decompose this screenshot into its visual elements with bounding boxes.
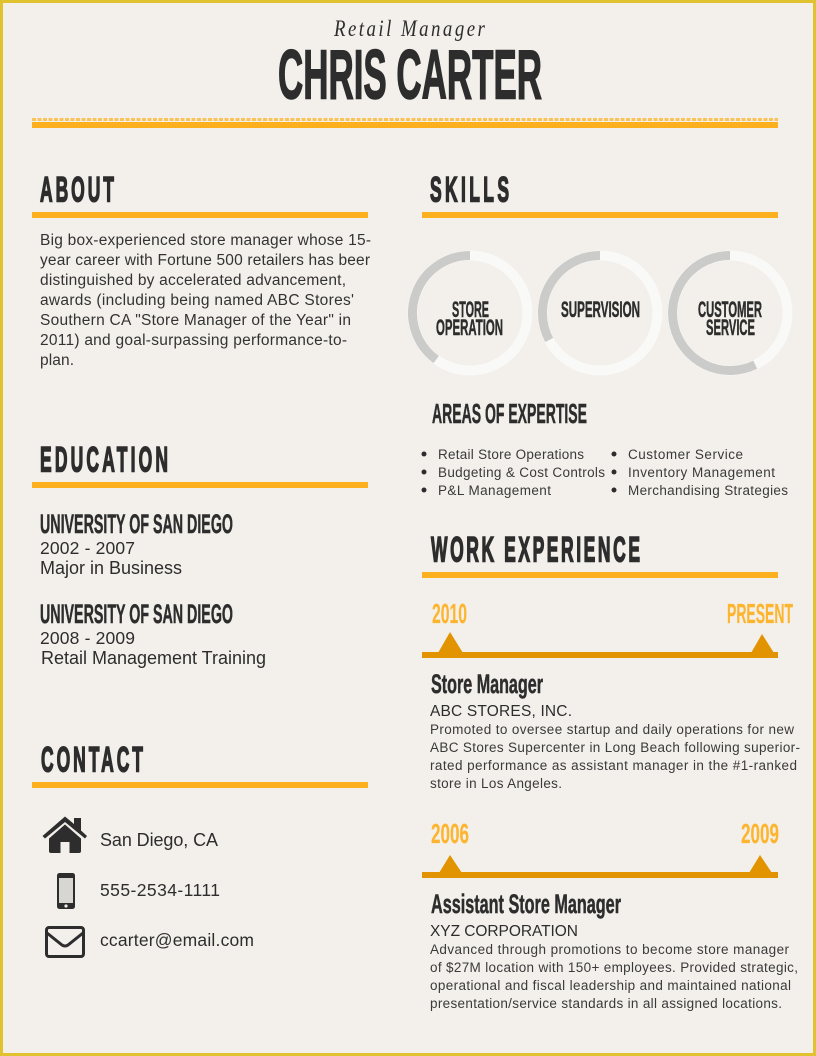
- about text: 2011) and goal-surpassing performance-to-: [40, 332, 347, 349]
- expertise list: Retail Store Operations: [438, 447, 584, 462]
- about text: Southern CA "Store Manager of the Year" in: [40, 312, 351, 329]
- job: store manager: Store Manager: [431, 669, 543, 699]
- education entry 2: Retail Management Training: [41, 648, 266, 668]
- job: assistant store manager: operational and fiscal leadership and maintained national: [430, 978, 791, 993]
- icon: phone: [57, 873, 75, 909]
- job: assistant store manager: presentation/service standards in all assigned locations.: [430, 996, 782, 1011]
- skill ring: supervision: [542, 255, 658, 370]
- icon: envelope: [46, 928, 84, 956]
- education entry 2: [40, 599, 266, 668]
- timeline: 2010 to present: [422, 598, 793, 658]
- expertise list: [422, 447, 788, 498]
- panel: education: [32, 440, 368, 668]
- education entry 1: 2002 - 2007: [40, 538, 135, 558]
- education entry 2: UNIVERSITY OF SAN DIEGO: [40, 599, 233, 629]
- job: store manager: ABC STORES, INC.: [430, 703, 572, 720]
- header: [32, 15, 778, 128]
- heading: about: ABOUT: [40, 170, 114, 209]
- education entry 1: UNIVERSITY OF SAN DIEGO: [40, 509, 233, 539]
- panel: contact: [32, 740, 368, 956]
- panel: about: [32, 170, 371, 369]
- education entry 1: Major in Business: [40, 558, 182, 578]
- heading: skills: SKILLS: [430, 170, 509, 209]
- header rule: [32, 120, 778, 128]
- about text: year career with Fortune 500 retailers has beer: [40, 252, 370, 269]
- job: store manager: ABC Stores Supercenter in Long Beach following superior-: [430, 740, 800, 755]
- job: store manager: store in Los Angeles.: [430, 776, 562, 791]
- about text: awards (including being named ABC Stores': [40, 292, 354, 309]
- header: CHRIS CARTER: [278, 36, 542, 114]
- panel: work experience: [422, 530, 800, 1011]
- skill ring: store operation: OPERATION: [436, 315, 503, 340]
- expertise list: Budgeting & Cost Controls: [438, 465, 605, 480]
- expertise list: Customer Service: [628, 447, 743, 462]
- job: store manager: [430, 669, 800, 791]
- about text: Big box-experienced store manager whose 15-: [40, 232, 371, 249]
- heading: education: EDUCATION: [40, 440, 168, 479]
- contact: phone: 555-2534-1111: [100, 880, 220, 900]
- skill ring: customer service: SERVICE: [706, 315, 755, 340]
- about text: [40, 232, 371, 369]
- job: assistant store manager: Advanced through promotions to become store manager: [430, 942, 790, 957]
- about text: distinguished by accelerated advancement,: [40, 272, 346, 289]
- contact: location: San Diego, CA: [100, 830, 218, 850]
- job: assistant store manager: XYZ CORPORATION: [430, 923, 578, 940]
- skill ring: store operation: [412, 256, 528, 370]
- job: assistant store manager: [430, 889, 798, 1011]
- job: assistant store manager: Assistant Store Manager: [431, 889, 621, 919]
- skill ring: customer service: [672, 256, 788, 370]
- education entry 2: 2008 - 2009: [40, 628, 135, 648]
- skill ring: store operation: STORE: [452, 297, 489, 322]
- expertise list: P&L Management: [438, 483, 551, 498]
- timeline: 2006 to 2009: 2006: [431, 818, 469, 849]
- icon: house: [42, 816, 87, 853]
- heading: contact: CONTACT: [41, 740, 143, 779]
- education entry 1: [40, 509, 233, 578]
- about text: plan.: [40, 352, 74, 369]
- expertise list: Merchandising Strategies: [628, 483, 788, 498]
- timeline: 2006 to 2009: [422, 818, 779, 878]
- contact: email: ccarter@email.com: [100, 930, 254, 950]
- job title: Retail Manager: [333, 15, 486, 41]
- timeline: 2010 to present: 2010: [432, 598, 467, 629]
- heading: areas of expertise: AREAS OF EXPERTISE: [432, 398, 587, 429]
- expertise list: Inventory Management: [628, 465, 775, 480]
- timeline: 2006 to 2009: 2009: [741, 818, 779, 849]
- job: store manager: Promoted to oversee startup and daily operations for new: [430, 722, 794, 737]
- panel: skills: [412, 170, 788, 498]
- job: assistant store manager: of $27M location with 150+ employees. Provided strategic,: [430, 960, 798, 975]
- job: store manager: rated performance as assistant manager in the #1-ranked: [430, 758, 797, 773]
- heading: work experience: WORK EXPERIENCE: [431, 530, 640, 569]
- skill ring: supervision: SUPERVISION: [561, 297, 640, 322]
